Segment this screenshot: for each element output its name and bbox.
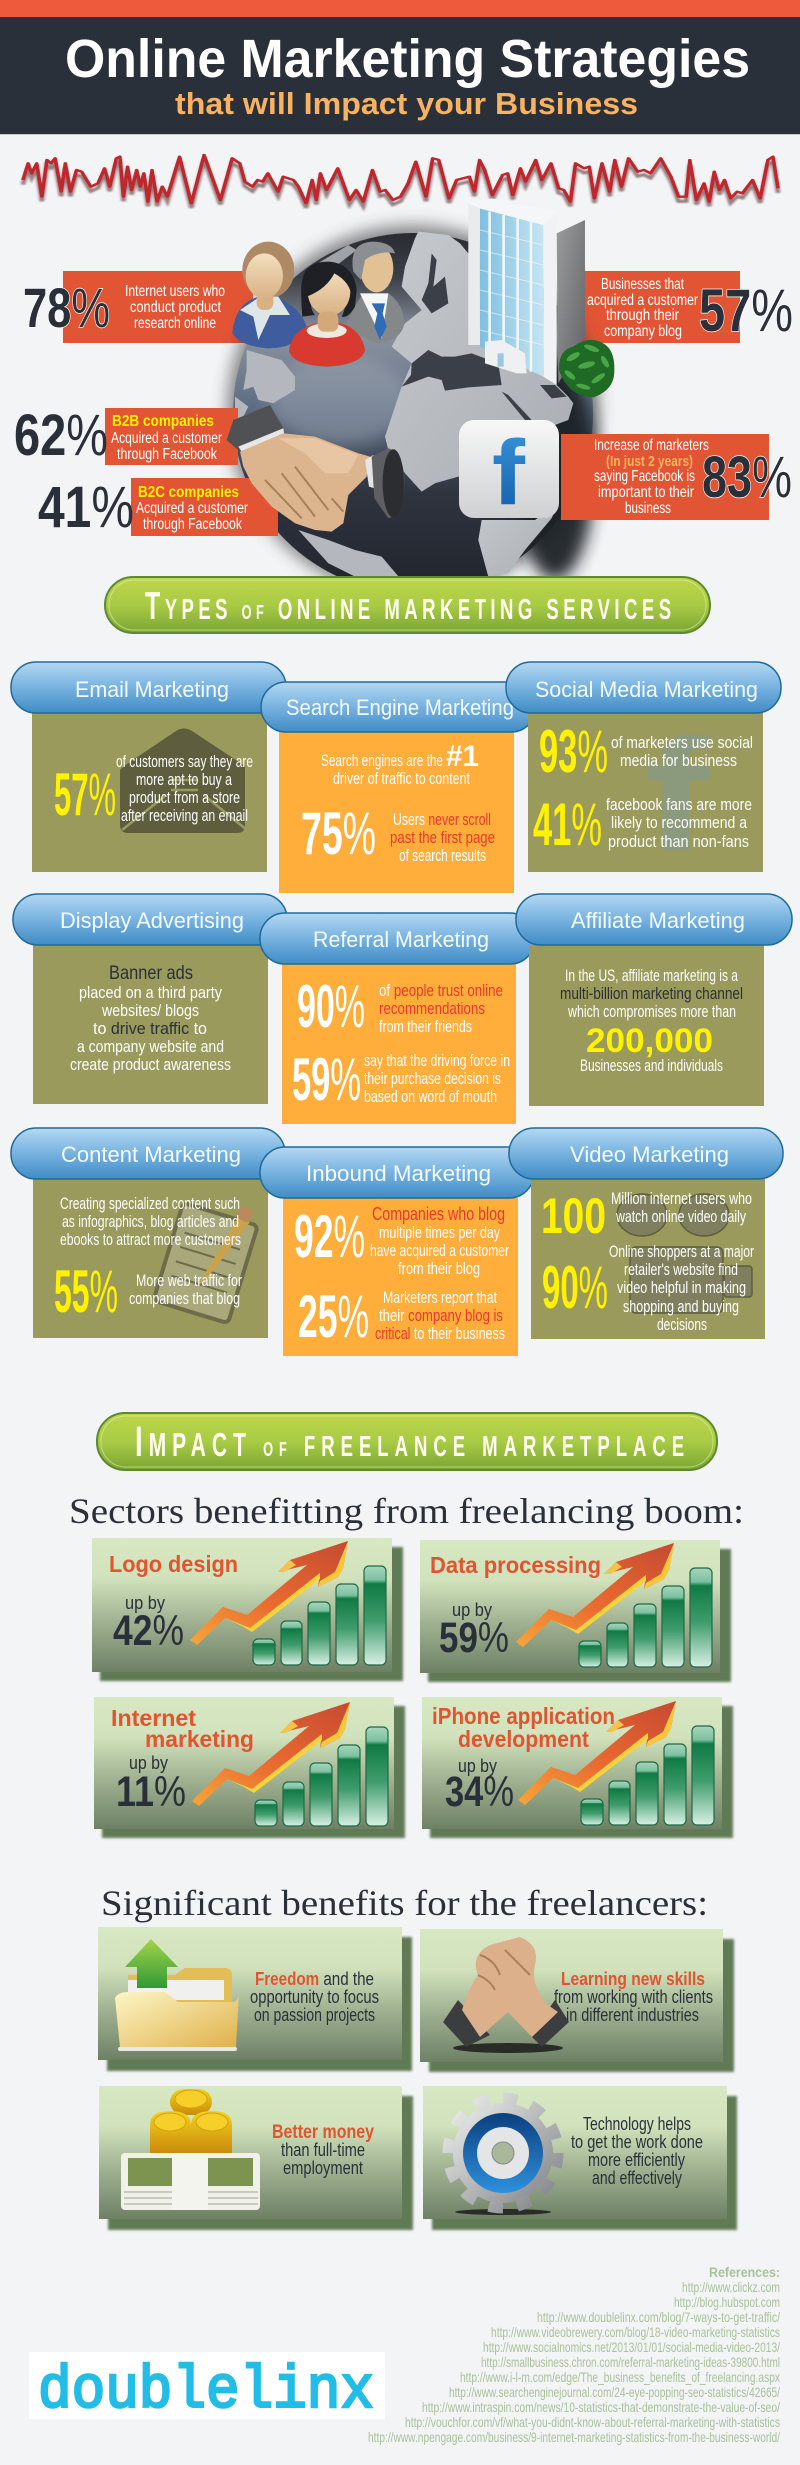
stat text [294, 1203, 509, 1350]
stat text: media for business [620, 752, 737, 770]
icon: facebook tile [459, 420, 559, 524]
stat: 78% internet users: conduct product [130, 299, 222, 316]
stat: 62% B2B: through Facebook [117, 446, 217, 463]
card: freedom [98, 1927, 412, 2071]
benefit text: Freedom and the [255, 1969, 374, 1989]
pill heading: Search Engine Marketing [286, 695, 514, 720]
logo: doublelinx: doublelinx [38, 2358, 374, 2426]
pill heading: Video Marketing [570, 1142, 729, 1167]
stat: 41% B2C [38, 475, 248, 540]
stat text: critical to their business [375, 1325, 505, 1343]
stat text: of customers say they are [116, 753, 253, 771]
stat: 83% facebook: (In just 2 years) [606, 453, 693, 470]
globe [227, 225, 599, 597]
stat: 78% internet users: 78% [23, 276, 110, 339]
pill heading [13, 894, 287, 945]
pulse line [23, 155, 778, 208]
stat text: video helpful in making [617, 1279, 746, 1297]
section heading: types of online marketing services [105, 577, 710, 633]
card: internet marketing [94, 1697, 405, 1838]
icon: clasped hands [443, 1937, 569, 2053]
stat text [301, 740, 495, 867]
body text: to drive traffic to [93, 1020, 207, 1038]
stat text [541, 1188, 754, 1334]
icon: facebook tile: f [492, 422, 525, 524]
stat text: have acquired a customer [370, 1242, 509, 1260]
stat text: after receiving an email [121, 807, 248, 825]
pill heading: Inbound Marketing [306, 1161, 491, 1186]
panel: video marketing [509, 1128, 783, 1339]
stat text [292, 973, 510, 1113]
stat text: more apt to buy a [136, 771, 233, 789]
benefit text: in different industries [566, 2005, 699, 2025]
card: logo design: 42% [113, 1607, 184, 1655]
stat: 62% B2B: B2B companies [112, 413, 214, 430]
card: iphone application development: development [458, 1726, 589, 1752]
stat text: 25% [298, 1283, 369, 1350]
benefit text: on passion projects [254, 2005, 375, 2025]
stat: 57% company blog: acquired a customer [587, 292, 698, 309]
card: internet marketing: marketing [145, 1726, 254, 1752]
card: internet marketing: up by [129, 1753, 168, 1773]
stat text: companies that blog [129, 1290, 240, 1308]
stat text: Users never scroll [393, 811, 491, 829]
stat: 57% company blog: company blog [604, 323, 682, 340]
stat text: from their blog [398, 1260, 480, 1278]
stat text: 55% [54, 1258, 118, 1325]
pill heading: Email Marketing [75, 677, 229, 702]
benefit text: employment [283, 2158, 363, 2178]
benefit text [554, 1969, 713, 2025]
stat text: of people trust online [379, 982, 503, 1000]
stat text: Companies who blog [372, 1204, 505, 1224]
stat text: product from a store [129, 789, 240, 807]
benefit text [272, 2122, 374, 2178]
benefit text [250, 1969, 379, 2025]
panel: email marketing [11, 662, 286, 872]
stat text: their company blog is [379, 1307, 503, 1325]
benefit text: from working with clients [554, 1987, 713, 2007]
stat text [54, 753, 253, 828]
card: iphone application development: iPhone application [432, 1703, 615, 1729]
pill heading [509, 1128, 783, 1179]
body text: placed on a third party [79, 984, 223, 1002]
card: data processing [420, 1540, 731, 1682]
stat text: ebooks to attract more customers [60, 1231, 241, 1249]
panel: referral marketing [260, 913, 535, 1124]
stat text: shopping and buying [623, 1298, 739, 1316]
stat text: recommendations [379, 1000, 485, 1018]
benefit text [571, 2114, 703, 2188]
stat text: 92% [294, 1203, 365, 1270]
stat text [54, 1195, 242, 1325]
body text: create product awareness [70, 1056, 231, 1074]
panel: content marketing [11, 1128, 285, 1338]
card: iphone application development: up by [458, 1756, 497, 1776]
panel: affiliate marketing [516, 894, 792, 1106]
pill heading [260, 1147, 534, 1198]
illustration: three business people [232, 242, 404, 367]
stat text: their purchase decision is [364, 1070, 501, 1088]
stat: 57% company blog: through their [606, 307, 679, 324]
icon: video camera [617, 1194, 752, 1313]
stat: 62% B2B: Acquired a customer [111, 430, 222, 447]
stat text: based on word of mouth [364, 1088, 497, 1106]
card: data processing: up by [452, 1600, 492, 1620]
stat text: More web traffic for [136, 1272, 242, 1290]
stat: 41% B2C: 41% [38, 475, 134, 540]
heading: significant benefits: Significant benefits for the freelancers: [101, 1883, 708, 1923]
body text: multi-billion marketing channel [560, 985, 743, 1003]
icon: folder with arrow [115, 1939, 239, 2051]
benefit text: Learning new skills [561, 1969, 705, 1989]
stat text: Million internet users who [611, 1190, 752, 1208]
stat text: of marketers use social [611, 734, 753, 752]
body text: In the US, affiliate marketing is a [565, 967, 739, 985]
stat text: 57% [54, 761, 116, 828]
benefit text: Technology helps [583, 2114, 691, 2134]
benefit text: and effectively [592, 2168, 682, 2188]
benefit text: opportunity to focus [250, 1987, 379, 2007]
pill heading [506, 662, 781, 713]
card: iphone application development [422, 1697, 733, 1838]
stat text: retailer's website find [624, 1261, 738, 1279]
stat: 83% facebook: saying Facebook is [594, 468, 695, 485]
body text [560, 967, 743, 1075]
body text: Banner ads [109, 963, 193, 984]
references [368, 2264, 780, 2445]
card: logo design: up by [125, 1593, 165, 1613]
stat boxes behind globe [63, 271, 740, 343]
stat: 78% internet users [23, 276, 225, 339]
stat: 83% facebook: important to their [598, 484, 694, 501]
stat text: Search engines are the [321, 752, 443, 770]
stat text [533, 718, 753, 858]
pill heading [11, 1128, 285, 1179]
illustration: handshake [227, 405, 404, 532]
panel: social media marketing [506, 662, 781, 884]
header banner [0, 0, 800, 135]
card: iphone application development: 34% [445, 1768, 514, 1816]
card: learning new skills [420, 1929, 734, 2072]
pill heading: Display Advertising [60, 908, 244, 933]
pill heading [260, 913, 535, 964]
stat text: 100 [541, 1188, 606, 1244]
stat text: #1 [446, 740, 479, 773]
icon: gear [449, 2099, 557, 2215]
stat: 41% B2C: Acquired a customer [136, 500, 248, 517]
section heading: impact of freelance marketplace: IMPACT OF FREELANCE MARKETPLACE [135, 1417, 684, 1466]
stat text: Creating specialized content such [60, 1195, 240, 1213]
pill heading [11, 662, 286, 713]
benefit text: Better money [272, 2122, 374, 2143]
body text: websites/ blogs [101, 1002, 199, 1020]
stat text: as infographics, blog articles and [62, 1213, 239, 1231]
stat: 41% B2C: through Facebook [143, 516, 242, 533]
stat: 41% B2C: B2C companies [138, 484, 239, 501]
stat text: of search results [399, 847, 486, 865]
card: internet marketing: 11% [116, 1768, 186, 1816]
illustration: office building [468, 198, 585, 385]
stat text: 90% [297, 973, 365, 1040]
stat text: 90% [542, 1254, 608, 1321]
stat boxes over globe [105, 408, 769, 536]
pill heading: Social Media Marketing [535, 677, 758, 702]
icon: notepad and pencil [153, 1203, 258, 1323]
stat text: 75% [301, 800, 376, 867]
stat: 57% company blog [587, 276, 793, 344]
pill heading: Referral Marketing [313, 927, 489, 952]
stat text: past the first page [390, 829, 495, 847]
stat text: Marketers report that [383, 1289, 497, 1307]
pill heading [516, 894, 792, 945]
stat: 78% internet users: research online [134, 315, 216, 332]
benefit text: to get the work done [571, 2132, 703, 2152]
stat text: 59% [292, 1046, 361, 1113]
body text: a company website and [77, 1038, 224, 1056]
card: data processing: Data processing [430, 1552, 601, 1578]
stat text: decisions [657, 1316, 707, 1334]
references: References: [709, 2264, 780, 2280]
card: logo design [92, 1538, 403, 1681]
illustration: bush [559, 340, 614, 397]
body text: which compromises more than [567, 1003, 736, 1021]
stat: 78% internet users: Internet users who [125, 283, 225, 300]
pill heading: Affiliate Marketing [571, 908, 745, 933]
card: internet marketing: Internet [111, 1705, 196, 1731]
stat: 83% facebook: Increase of marketers [594, 437, 709, 454]
heading: sectors benefitting: Sectors benefitting from freelancing boom: [69, 1491, 744, 1531]
stat: 83% facebook [594, 437, 792, 517]
panel: inbound marketing [260, 1147, 534, 1356]
stat text: multiple times per day [379, 1224, 501, 1242]
benefit text: than full-time [281, 2140, 365, 2160]
benefit text: more efficiently [588, 2150, 685, 2170]
pill heading [261, 682, 536, 732]
body text: Businesses and individuals [580, 1057, 723, 1075]
stat text: 41% [533, 791, 602, 858]
stat: 83% facebook: business [625, 500, 671, 517]
stat text: likely to recommend a [611, 814, 748, 832]
stat text: say that the driving force in [364, 1052, 510, 1070]
body text: 200,000 [586, 1022, 713, 1060]
stat: 62% B2B [14, 403, 222, 468]
stat: 57% company blog: Businesses that [601, 276, 685, 293]
subtitle: that will Impact your Business [175, 86, 638, 121]
section heading: types of online marketing services: TYPES OF ONLINE MARKETING SERVICES [145, 583, 671, 627]
card: better money [99, 2086, 413, 2230]
icon: coins and cash [121, 2089, 260, 2210]
icon: faded facebook f: f [644, 705, 710, 884]
card: logo design: Logo design [109, 1551, 238, 1577]
panel: search engine marketing [261, 682, 536, 893]
icon: envelope [120, 728, 247, 833]
stat text: watch online video daily [615, 1208, 747, 1226]
stat text: 93% [539, 718, 608, 785]
pill heading: Content Marketing [61, 1142, 241, 1167]
body text [70, 963, 231, 1074]
stat text: driver of traffic to content [333, 770, 470, 788]
panel: display advertising [13, 894, 287, 1104]
stat text: from their friends [379, 1018, 472, 1036]
land masses [235, 232, 573, 578]
title: Online Marketing Strategies [65, 29, 750, 89]
card: technology [423, 2086, 737, 2230]
stat text: product than non-fans [608, 833, 749, 851]
stat: 62% B2B: 62% [14, 403, 108, 468]
stat text: facebook fans are more [606, 796, 752, 814]
card: data processing: 59% [439, 1614, 509, 1662]
